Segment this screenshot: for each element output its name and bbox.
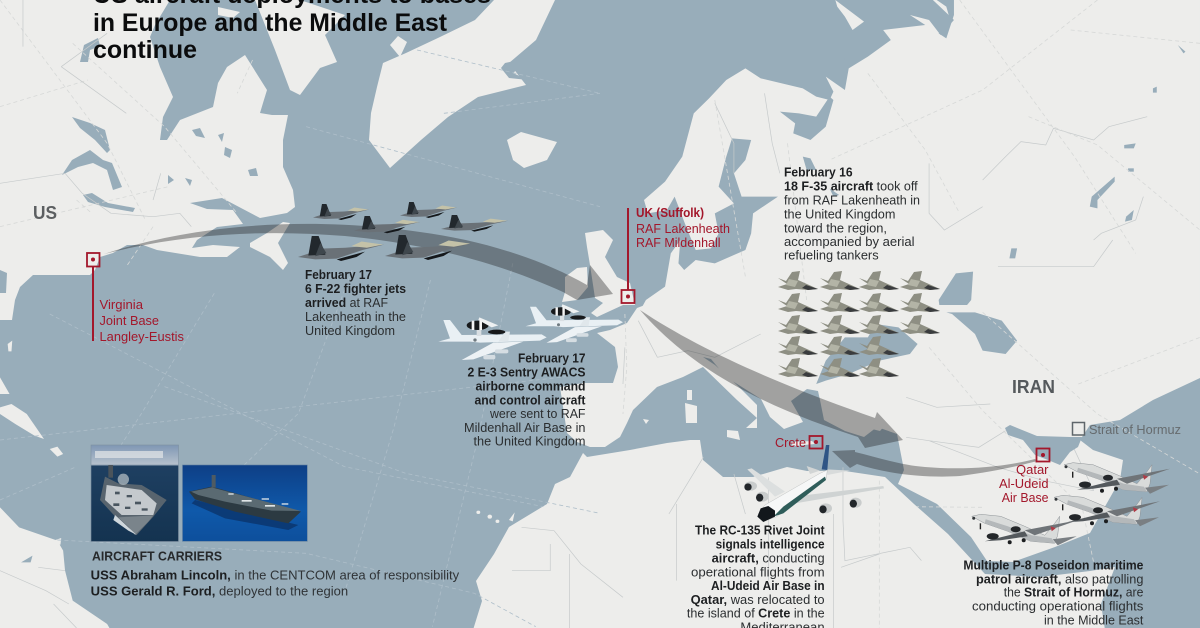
text: F-35 deployment: February 16 bbox=[784, 166, 853, 180]
Russia, Scandinavia and central Europe bbox=[638, 0, 1200, 314]
marker and label: UK Suffolk: UK (Suffolk) bbox=[636, 206, 704, 220]
arrow: United Kingdom to Middle East bbox=[640, 310, 903, 448]
aircraft: E-3 Sentry AWACS bbox=[438, 304, 623, 360]
text: E-3 deployment bbox=[464, 352, 586, 449]
text: RC-135 relocation: the island of Crete in the bbox=[687, 606, 825, 620]
text: F-22 deployment: Lakenheath in the bbox=[305, 310, 406, 324]
text: aircraft carriers: AIRCRAFT CARRIERS bbox=[92, 549, 222, 564]
text: E-3 deployment: February 17 bbox=[518, 352, 586, 366]
text: E-3 deployment: airborne command bbox=[476, 380, 586, 394]
text: RC-135 relocation: aircraft, conducting bbox=[712, 551, 825, 565]
text: E-3 deployment: were sent to RAF bbox=[489, 407, 586, 421]
aircraft: RC-135 Rivet Joint bbox=[744, 445, 884, 522]
text: F-35 deployment: from RAF Lakenheath in bbox=[784, 193, 920, 207]
marker and label: Crete: Crete bbox=[775, 436, 806, 450]
marker and label: Virginia: Langley-Eustis bbox=[100, 330, 184, 344]
text: F-35 deployment: 18 F-35 aircraft took off bbox=[784, 180, 918, 194]
text: F-22 deployment: 6 F-22 fighter jets bbox=[305, 282, 406, 296]
title: in Europe and the Middle East bbox=[93, 9, 448, 37]
text: P-8 patrol: conducting operational flights bbox=[972, 600, 1143, 614]
graticule over Atlantic and Canada bbox=[0, 0, 600, 627]
text: F-35 deployment: toward the region, bbox=[784, 221, 887, 235]
photo: USS Gerald R. Ford carrier bbox=[182, 465, 307, 541]
Africa bbox=[473, 440, 1115, 628]
Britain and Ireland bbox=[562, 230, 635, 317]
arrow: Virginia to United Kingdom bbox=[104, 224, 613, 300]
text: F-22 deployment: United Kingdom bbox=[305, 324, 395, 338]
aircraft: P-8 Poseidon trio bbox=[972, 463, 1170, 545]
text: RC-135 relocation: Qatar, was relocated to bbox=[691, 593, 825, 607]
southern Europe, Turkey, Iran and Arabia bbox=[560, 305, 1200, 581]
text: RC-135 relocation: The RC-135 Rivet Joint bbox=[695, 524, 825, 538]
marker and label: UK Suffolk bbox=[622, 206, 730, 303]
text: RC-135 relocation bbox=[687, 524, 825, 628]
Greenland and Iceland bbox=[369, 0, 557, 168]
text: P-8 patrol bbox=[963, 559, 1144, 628]
text: RC-135 relocation: operational flights from bbox=[691, 565, 825, 579]
text: F-22 deployment: arrived at RAF bbox=[305, 296, 388, 310]
photo: USS Abraham Lincoln carrier bbox=[91, 445, 178, 542]
marker and label: Crete bbox=[775, 436, 822, 450]
arrow: Qatar to Crete bbox=[832, 450, 1037, 477]
aircraft: F-22 fighter jets bbox=[298, 202, 508, 261]
marker and label: Virginia: Virginia bbox=[100, 298, 143, 312]
marker and label: Qatar Al-Udeid: Air Base bbox=[1002, 491, 1049, 505]
text: RC-135 relocation: signals intelligence bbox=[716, 538, 825, 552]
text: F-22 deployment bbox=[305, 268, 406, 338]
text: F-35 deployment: refueling tankers bbox=[784, 249, 879, 263]
text: P-8 patrol: the Strait of Hormuz, are bbox=[1004, 586, 1143, 600]
marker and label: UK Suffolk: RAF Mildenhall bbox=[636, 236, 720, 250]
text: P-8 patrol: in the Middle East bbox=[1044, 614, 1144, 628]
title bbox=[93, 0, 491, 64]
text: RC-135 relocation: Al-Udeid Air Base in bbox=[711, 579, 825, 593]
text: E-3 deployment: the United Kingdom bbox=[474, 435, 586, 449]
text: F-22 deployment: February 17 bbox=[305, 268, 372, 282]
label: Iran: IRAN bbox=[1012, 377, 1055, 397]
South America and Caribbean bbox=[0, 341, 515, 628]
aircraft: 18 F-35 formation bbox=[778, 271, 940, 377]
marker and label: Qatar Al-Udeid: Al-Udeid bbox=[999, 477, 1049, 491]
label: US: US bbox=[33, 203, 57, 223]
text: aircraft carriers: USS Gerald R. Ford, deployed to the region bbox=[91, 584, 348, 599]
text: P-8 patrol: Multiple P-8 Poseidon maritime bbox=[963, 559, 1143, 573]
text: E-3 deployment: 2 E-3 Sentry AWACS bbox=[468, 366, 586, 380]
text: E-3 deployment: and control aircraft bbox=[474, 393, 586, 407]
marker and label: Virginia: Joint Base bbox=[100, 314, 159, 328]
text: aircraft carriers: USS Abraham Lincoln, in the CENTCOM area of responsibility bbox=[91, 567, 460, 582]
marker and label: Strait of Hormuz: Strait of Hormuz bbox=[1089, 423, 1181, 437]
text: aircraft carriers bbox=[91, 549, 460, 599]
text: F-35 deployment bbox=[784, 166, 920, 263]
marker and label: UK Suffolk: RAF Lakenheath bbox=[636, 222, 730, 236]
title: continue bbox=[93, 36, 197, 64]
text: F-35 deployment: the United Kingdom bbox=[784, 207, 895, 221]
text: E-3 deployment: Mildenhall Air Base in bbox=[464, 421, 586, 435]
text: F-35 deployment: accompanied by aerial bbox=[784, 235, 914, 249]
marker and label: Qatar Al-Udeid bbox=[999, 448, 1050, 505]
North America bbox=[0, 0, 407, 320]
marker and label: Virginia bbox=[87, 253, 184, 344]
text: P-8 patrol: patrol aircraft, also patrolling bbox=[976, 572, 1143, 586]
marker and label: Qatar Al-Udeid: Qatar bbox=[1016, 463, 1048, 477]
